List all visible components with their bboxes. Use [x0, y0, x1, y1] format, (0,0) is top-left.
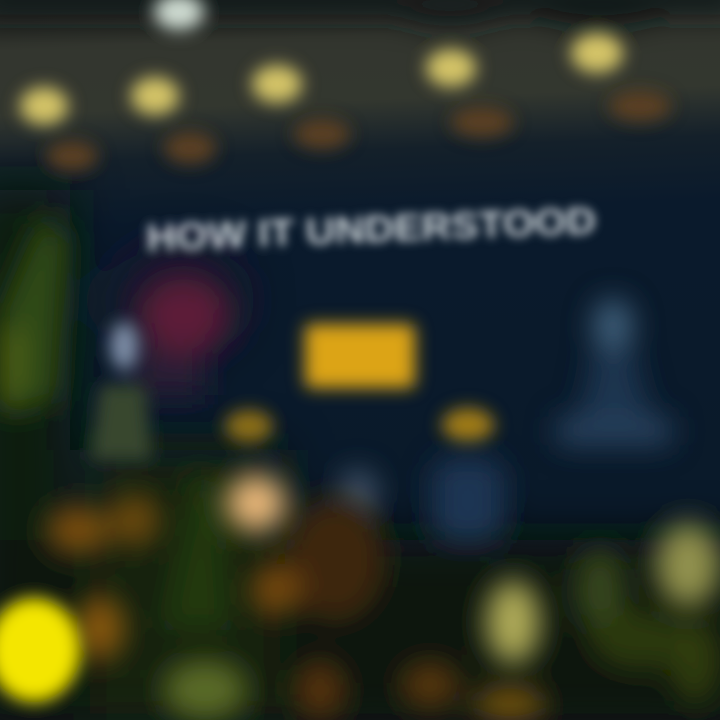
icon: center blue figure	[432, 458, 504, 542]
bokeh: orange left	[46, 494, 159, 660]
dark foliage background	[0, 190, 720, 720]
icon: left pale figure	[90, 322, 152, 460]
icon: red figure	[135, 278, 228, 395]
foliage: bottom green	[163, 660, 247, 720]
string lights: yellow bulbs	[20, 33, 623, 125]
bokeh: bright yellow	[0, 598, 80, 702]
icon: pale blue shape	[340, 470, 376, 522]
dark ceiling band	[0, 0, 720, 26]
icon: right blue person	[556, 299, 672, 446]
heading: HOW IT UNDERSTOOD	[146, 200, 597, 260]
ceiling light: white	[154, 0, 204, 30]
foliage: pale bud center	[486, 580, 540, 664]
string lights: orange reflections	[46, 91, 671, 171]
center box: yellow	[305, 324, 415, 388]
small label: yellow right	[442, 408, 494, 442]
small label: yellow left	[225, 410, 273, 442]
bokeh: warm glow	[226, 475, 286, 531]
foliage: right plants	[574, 548, 720, 704]
foliage: pale bud right	[656, 523, 720, 607]
foliage: left plant	[0, 215, 232, 630]
bokeh: brown cluster	[251, 498, 546, 720]
